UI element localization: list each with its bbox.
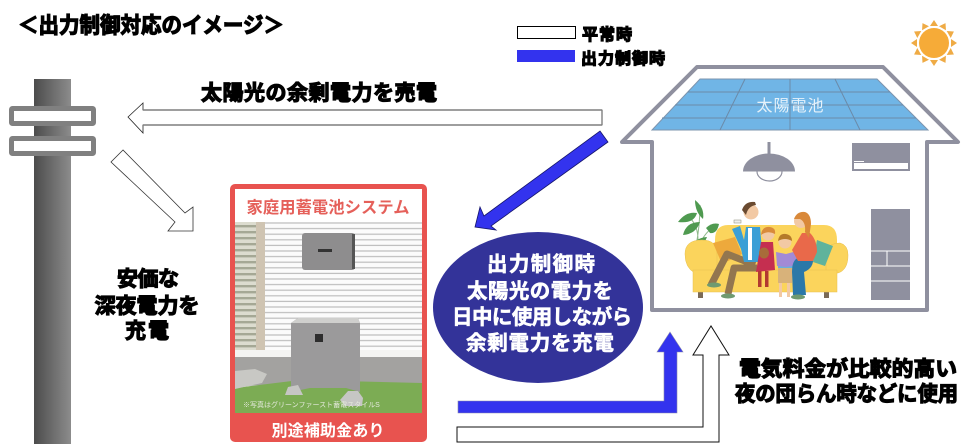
legend: normal time <box>518 26 632 44</box>
callout: output control explanation <box>433 232 643 383</box>
plant <box>678 200 719 249</box>
illustration: family on sofa <box>678 200 848 300</box>
text: cheap night power charge: 安価な <box>117 268 179 291</box>
utility pole <box>12 79 94 444</box>
heading: home battery system: 家庭用蓄電池システム <box>246 198 410 217</box>
cushions <box>713 237 742 264</box>
title: ＜出力制御対応のイメージ＞ <box>18 13 284 38</box>
icon: ceiling lamp <box>743 142 795 181</box>
arrow: output control from solar to battery <box>475 131 608 230</box>
callout: output control explanation: 太陽光の電力を <box>467 280 613 303</box>
panel: home battery system <box>230 184 427 442</box>
boy <box>778 236 792 248</box>
text: use at night: 夜の団らん時などに使用 <box>735 383 958 406</box>
callout: output control explanation: 余剰電力を充電 <box>466 332 614 355</box>
girl <box>762 228 774 240</box>
text: cheap night power charge <box>94 268 200 343</box>
text: use at night <box>735 357 958 406</box>
legend <box>517 26 665 68</box>
heading: sell surplus solar power: 太陽光の余剰電力を売電 <box>201 82 437 105</box>
sofa <box>698 290 703 298</box>
legend: output control time <box>517 50 665 68</box>
icon: air conditioner <box>852 143 910 171</box>
callout: output control explanation: 出力制御時 <box>487 253 595 276</box>
legend: normal time: 平常時 <box>582 26 632 44</box>
legend: output control time: 出力制御時 <box>581 50 665 68</box>
photo: battery units on a wall: ※写真はグリーンファースト蓄電スタイルS <box>243 400 380 409</box>
solar panels <box>652 79 928 130</box>
callout: output control explanation: 日中に使用しながら <box>452 305 632 329</box>
text: cheap night power charge: 深夜電力を <box>94 295 200 318</box>
arrow: night power from pole to battery <box>111 150 193 231</box>
photo: battery units on a wall <box>235 222 422 413</box>
label: separate subsidy available: 別途補助金あり <box>272 421 384 440</box>
text: cheap night power charge: 充電 <box>125 320 169 343</box>
text: use at night: 電気料金が比較的高い <box>739 357 957 381</box>
house outline <box>622 67 958 310</box>
arrow: white battery to house <box>457 326 729 442</box>
arrow: sell surplus to grid <box>128 103 602 133</box>
arrow: blue battery to house <box>458 332 683 413</box>
house <box>622 67 958 310</box>
mother <box>792 258 813 295</box>
icon: refrigerator <box>871 209 910 300</box>
solar panels: 太陽電池 <box>756 97 824 115</box>
icon: sun <box>911 20 957 66</box>
father <box>711 254 755 285</box>
